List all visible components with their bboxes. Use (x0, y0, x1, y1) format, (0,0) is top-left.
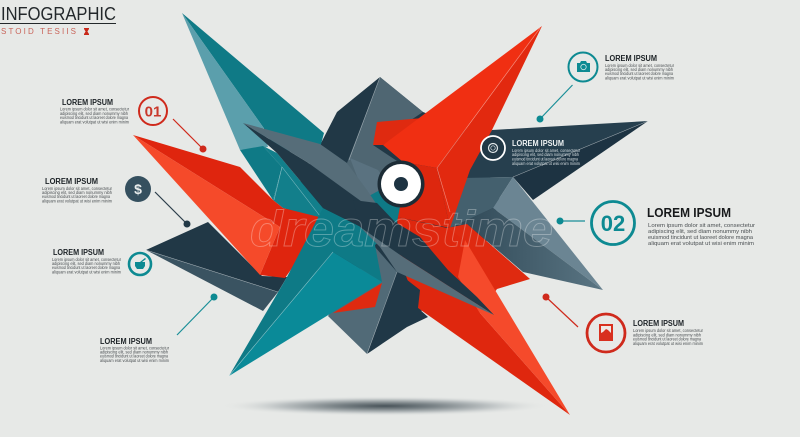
navy lower left spike (146, 222, 287, 311)
watermark: dreamstime (250, 201, 553, 257)
heading: LOREM IPSUM (633, 318, 684, 328)
callout mortar (52, 247, 151, 275)
body text: Lorem ipsum dolor sit amet, consectetur (52, 257, 121, 262)
grey lower centre (328, 247, 397, 354)
connector (536, 85, 572, 122)
body text: euismod tincidunt ut laoreet dolore magna (60, 115, 128, 120)
body text: euismod tincidunt ut laoreet dolore magna (633, 336, 701, 342)
teal left block (240, 146, 323, 219)
title: INFOGRAPHIC (1, 3, 116, 24)
callout camera (536, 52, 674, 122)
heading: LOREM IPSUM (605, 53, 657, 63)
icon: dollar: $ (134, 181, 142, 197)
body text: adipiscing elit, sed diam nonummy nibh (633, 332, 701, 338)
body text: euismod tincidunt ut laoreet dolore magna (648, 235, 754, 241)
icon: mortar (129, 253, 151, 275)
body text: adipiscing elit, sed diam nonummy nibh (648, 229, 752, 235)
top centre navy and grey peak (320, 77, 423, 225)
body text: euismod tincidunt ut laoreet dolore magna (100, 354, 168, 358)
body text (60, 106, 129, 124)
title: STOID TESIIS (1, 27, 76, 36)
body text (100, 346, 169, 363)
callout 02 (556, 202, 755, 247)
heading: LOREM IPSUM (62, 97, 113, 107)
connector (173, 119, 206, 152)
heading: LOREM IPSUM (512, 138, 564, 148)
body text: Lorem ipsum dolor sit amet, consectetur (60, 106, 129, 112)
body text: Lorem ipsum dolor sit amet, consectetur (648, 223, 755, 229)
body text: adipiscing elit, sed diam nonummy nibh (605, 67, 673, 72)
body text: Lorem ipsum dolor sit amet, consectetur (633, 328, 703, 333)
body text: Lorem ipsum dolor sit amet, consectetur (42, 186, 112, 191)
connector (177, 294, 218, 335)
connector (556, 218, 585, 224)
teal top spike (182, 13, 324, 153)
callout dollar (42, 176, 190, 228)
heading: LOREM IPSUM (45, 176, 98, 186)
callout 01 (60, 97, 206, 152)
body text (633, 328, 703, 346)
callout on navy spike (481, 136, 580, 166)
number badge 02 (592, 202, 634, 244)
number badge 01: 01 (145, 104, 161, 120)
callout image (542, 294, 703, 352)
callout lower left (100, 294, 218, 363)
heading: LOREM IPSUM (100, 336, 152, 346)
heading: LOREM IPSUM (53, 247, 104, 257)
body text: adipiscing elit, sed diam nonummy nibh (512, 152, 579, 157)
body text: Lorem ipsum dolor sit amet, consectetur (605, 63, 674, 68)
body text: adipiscing elit, sed diam nonummy nibh (100, 350, 168, 354)
body text: euismod tincidunt ut laoreet dolore magna (605, 71, 673, 76)
body text (605, 63, 674, 80)
body text: adipiscing elit, sed diam nonummy nibh (60, 111, 128, 116)
body text: euismod tincidunt ut laoreet dolore magna (512, 156, 578, 162)
body text (512, 148, 580, 166)
red top spike (373, 26, 542, 228)
body text: euismod tincidunt ut laoreet dolore magna (42, 194, 110, 199)
connector (542, 294, 578, 327)
navy right spike (450, 121, 648, 228)
heading: LOREM IPSUM (647, 206, 731, 220)
icon: target (481, 136, 505, 160)
red lower spike (397, 217, 570, 415)
icon: picture (587, 314, 625, 352)
teal lower spike (229, 190, 400, 376)
long grey diagonal blade (243, 123, 494, 315)
body text: aliquam erat volutpat ut wisi enim minim (633, 341, 703, 346)
body text: aliquam erat volutpat ut wisi enim minim (648, 241, 754, 247)
number badge 01 (139, 97, 167, 125)
ground shadow (220, 396, 550, 416)
small red fragment (333, 283, 382, 313)
navy bottom facet (367, 272, 428, 354)
body text: aliquam erat volutpat ut wisi enim minim (52, 270, 121, 274)
body text: Lorem ipsum dolor sit amet, consectetur (100, 346, 169, 350)
base fill (280, 77, 500, 320)
central polygon star (133, 13, 648, 415)
body text: aliquam erat volutpat ut wisi enim minim (42, 198, 112, 204)
title (0, 3, 116, 36)
connector (155, 192, 190, 228)
body text (648, 223, 755, 247)
body text (52, 257, 121, 274)
red right fragment (447, 224, 530, 313)
body text: adipiscing elit, sed diam nonummy nibh (42, 190, 113, 195)
number badge 02: 02 (601, 211, 625, 236)
body text: aliquam erat volutpat ut wisi enim minim (512, 161, 580, 166)
body text: aliquam erat volutpat ut wisi enim minim (605, 76, 674, 80)
icon: dollar (125, 176, 151, 202)
body text: adipiscing elit, sed diam nonummy nibh (52, 261, 120, 266)
grey right spike (450, 177, 603, 290)
body text: aliquam erat volutpat ut wisi enim minim (100, 358, 169, 363)
body text: aliquam erat volutpat ut wisi enim minim (60, 120, 129, 124)
icon: camera (568, 52, 598, 82)
red left spike (133, 135, 323, 278)
central eye icon (378, 160, 424, 208)
body text: euismod tincidunt ut laoreet dolore magna (52, 265, 120, 270)
body text (42, 186, 113, 204)
body text: Lorem ipsum dolor sit amet, consectetur (512, 148, 580, 153)
